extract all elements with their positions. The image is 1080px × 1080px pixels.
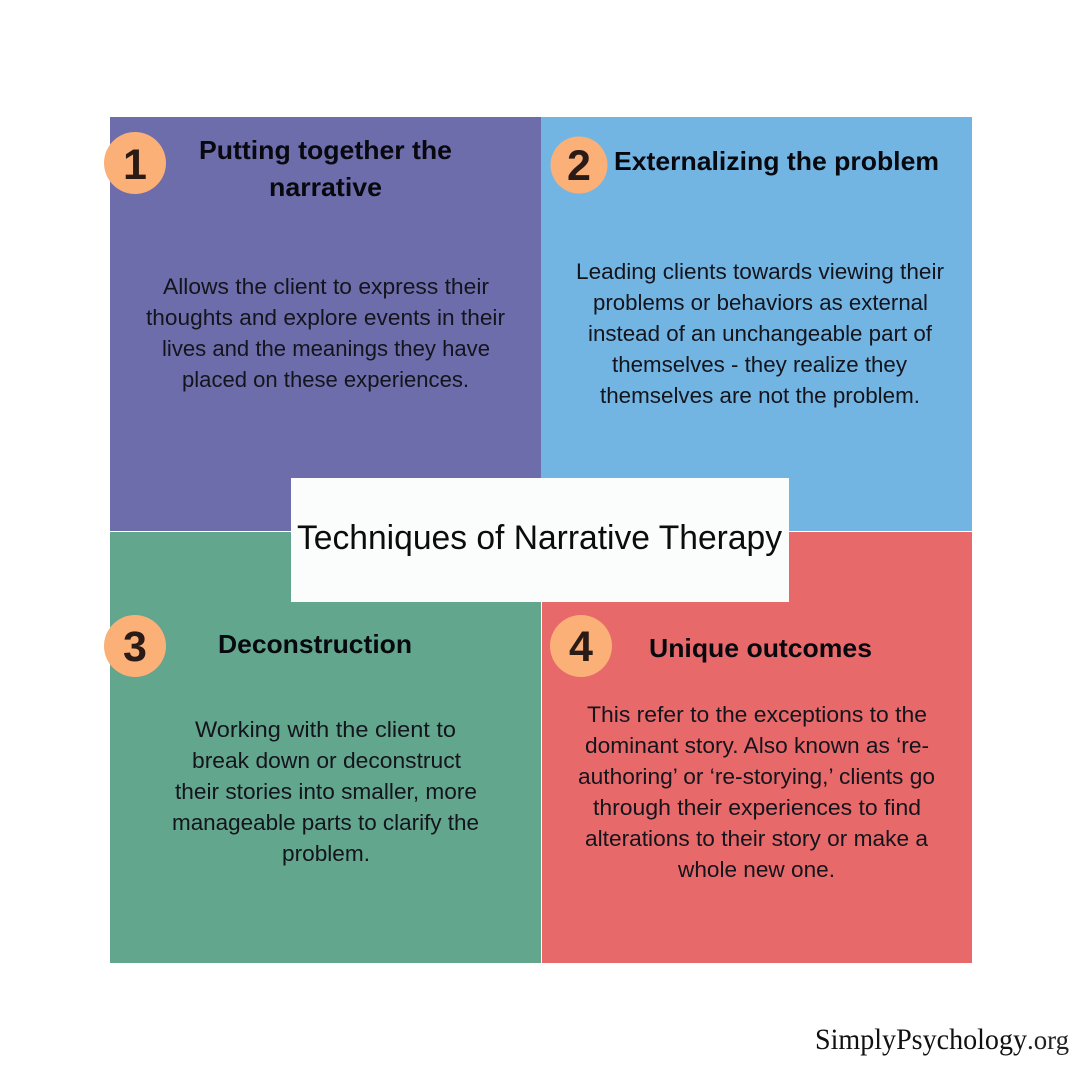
heading: panel 1 xyxy=(199,135,452,202)
text block: panel 1 body: Allows the client to express their xyxy=(163,274,490,299)
text block: panel 2 body: instead of an unchangeable part of xyxy=(588,321,933,346)
text block: panel 2 body: Leading clients towards viewing their xyxy=(576,259,945,284)
text block: panel 1 body: lives and the meanings they have xyxy=(162,336,490,361)
panel 2: externalizing the problem xyxy=(541,117,972,531)
text block: panel 1 body xyxy=(146,274,506,392)
text block: panel 4 body: through their experiences to find xyxy=(593,795,921,820)
text block: panel 2 body: problems or behaviors as external xyxy=(593,290,928,315)
text block: panel 3 body: their stories into smaller, more xyxy=(175,779,477,804)
footer: source credit: .org xyxy=(1027,1025,1069,1055)
panel 1: putting together the narrative xyxy=(104,117,541,531)
icon: number 3 badge: 3 xyxy=(123,623,147,671)
text block: panel 1 body: thoughts and explore events in their xyxy=(146,305,506,330)
text block: panel 2 body xyxy=(576,259,945,408)
heading: panel 4: Unique outcomes xyxy=(649,633,872,663)
icon: number 4 badge xyxy=(550,615,612,677)
heading: panel 3: Deconstruction xyxy=(218,629,412,659)
text block: panel 4 body xyxy=(578,702,935,882)
title box xyxy=(291,478,789,602)
text block: panel 2 body: themselves - they realize they xyxy=(612,352,908,377)
text block: panel 3 body xyxy=(172,717,479,866)
text block: panel 4 body: alterations to their story or make a xyxy=(585,826,928,851)
panel 4: unique outcomes xyxy=(542,532,972,963)
text block: panel 3 body: problem. xyxy=(282,841,370,866)
text block: panel 4 body: whole new one. xyxy=(677,857,835,882)
text block: panel 4 body: dominant story. Also known as ‘re- xyxy=(585,733,929,758)
icon: number 3 badge xyxy=(104,615,166,677)
icon: number 2 badge xyxy=(550,136,608,194)
text block: panel 3 body: manageable parts to clarify the xyxy=(172,810,479,835)
icon: number 1 badge: 1 xyxy=(123,141,147,189)
footer: source credit: SimplyPsychology xyxy=(815,1023,1027,1056)
icon: number 1 badge xyxy=(104,132,166,194)
text block: panel 4 body: authoring’ or ‘re-storying,’ clients go xyxy=(578,764,935,789)
heading: panel 1: Putting together the xyxy=(199,135,452,165)
text block: panel 3 body: Working with the client to xyxy=(195,717,456,742)
text block: panel 1 body: placed on these experiences. xyxy=(182,367,469,392)
icon: number 2 badge: 2 xyxy=(567,142,591,190)
text block: panel 2 body: themselves are not the problem. xyxy=(600,383,920,408)
title box: Techniques of Narrative Therapy xyxy=(297,519,782,557)
text block: panel 4 body: This refer to the exceptions to the xyxy=(587,702,927,727)
heading: panel 1: narrative xyxy=(269,172,382,202)
heading: panel 2: Externalizing the problem xyxy=(614,146,939,176)
text block: panel 3 body: break down or deconstruct xyxy=(192,748,462,773)
panel 3: deconstruction xyxy=(104,532,541,963)
icon: number 4 badge: 4 xyxy=(569,623,593,671)
